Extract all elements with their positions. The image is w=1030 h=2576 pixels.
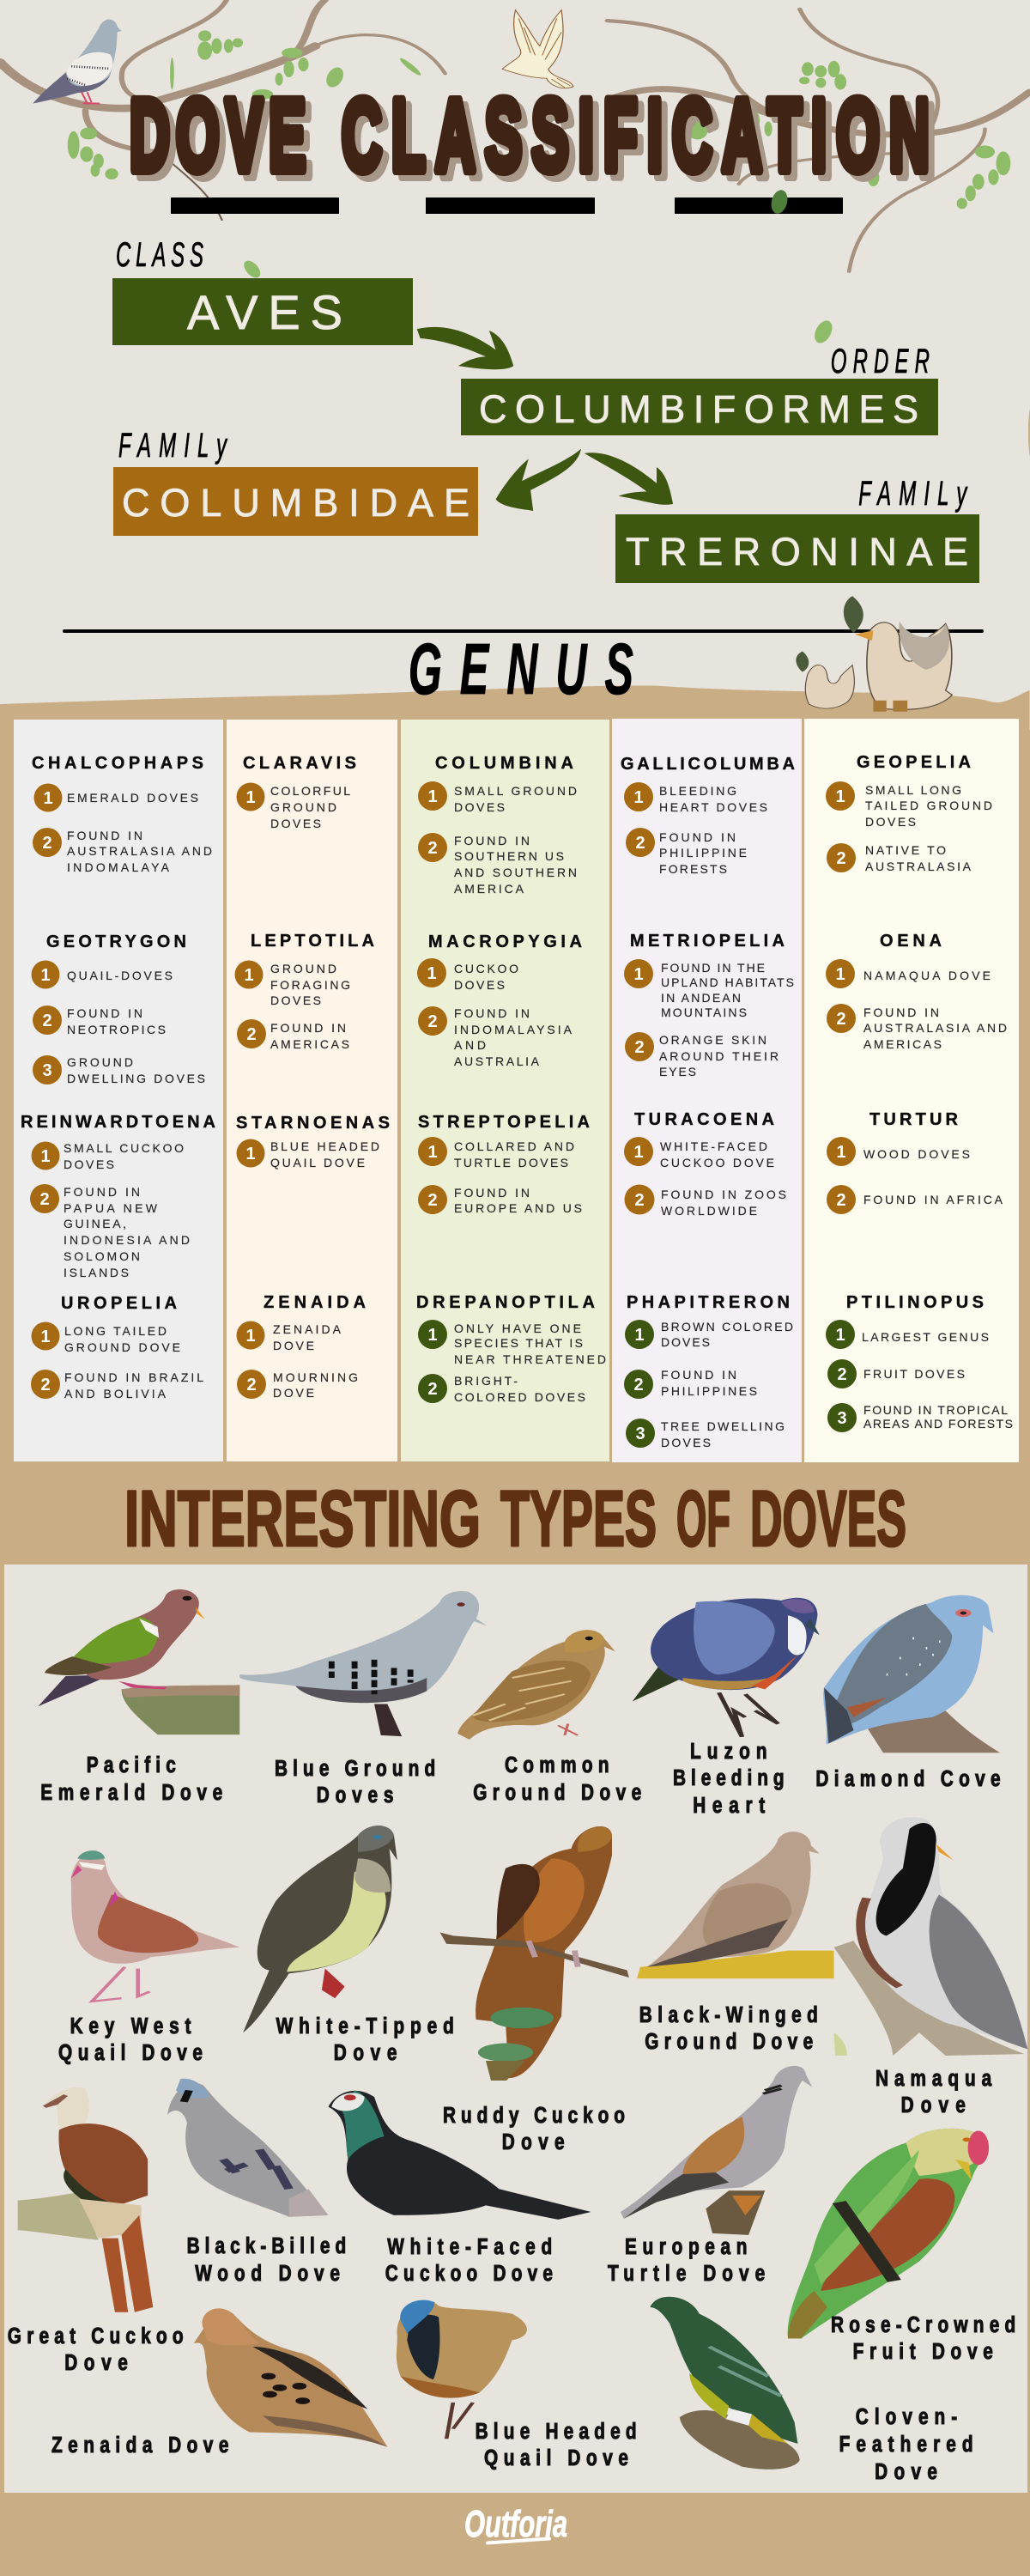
chalcophaps: CHALCOPHAPS	[32, 754, 203, 773]
chalcophaps	[32, 754, 212, 874]
label: white-faced cuckoo dove: White-Faced	[387, 2234, 552, 2259]
bird: pacific emerald dove	[38, 1589, 239, 1735]
label: key west quail dove: Quail Dove	[58, 2040, 203, 2065]
columbidae box: COLUMBIDAE	[122, 481, 470, 525]
phapitreron: 2	[633, 1376, 644, 1394]
streptopelia: TURTLE DOVES	[454, 1156, 568, 1170]
label: black-billed wood dove	[187, 2233, 346, 2286]
turtur: WOOD DOVES	[863, 1147, 970, 1161]
label: namaqua dove	[876, 2066, 992, 2117]
metriopelia: AROUND THEIR	[659, 1049, 779, 1063]
treroninae box: TRERONINAE	[626, 530, 968, 574]
label: blue ground doves: Blue Ground	[275, 1756, 435, 1781]
bird: black-billed wood dove	[167, 2079, 328, 2217]
geopelia: NATIVE TO	[865, 843, 946, 857]
section heading: interesting types of doves: OF	[676, 1475, 730, 1563]
reinwardtoena: ISLANDS	[64, 1266, 129, 1279]
section heading: interesting types of doves: TYPES	[500, 1475, 657, 1563]
label: european turtle dove: Turtle Dove	[608, 2261, 765, 2286]
title: DOVE	[130, 80, 312, 192]
ptilinopus: PTILINOPUS	[846, 1293, 984, 1312]
oena: 1	[835, 965, 845, 984]
metriopelia: IN ANDEAN	[661, 991, 741, 1005]
label: ruddy cuckoo dove: Dove	[502, 2129, 565, 2154]
oena: AMERICAS	[863, 1037, 942, 1051]
label: white-faced cuckoo dove	[385, 2234, 553, 2286]
label: cloven-feathered dove: Cloven-	[856, 2404, 957, 2429]
metriopelia: 1	[633, 965, 644, 984]
panel: dove gallery	[4, 1564, 1027, 2493]
bird: rose-crowned fruit dove	[788, 2129, 989, 2338]
bird: ruddy cuckoo dove	[440, 1826, 629, 2081]
label: luzon bleeding heart: Bleeding	[673, 1765, 785, 1790]
order label: ORDER	[831, 342, 930, 380]
metriopelia: 2	[634, 1038, 645, 1057]
drepanoptila: DREPANOPTILA	[416, 1293, 595, 1312]
turacoena	[624, 1110, 786, 1218]
reinwardtoena: GUINEA,	[64, 1217, 126, 1230]
turtur: TURTUR	[869, 1110, 959, 1129]
bird: blue ground dove	[239, 1591, 488, 1736]
uropelia: UROPELIA	[61, 1294, 177, 1313]
uropelia: 1	[40, 1327, 51, 1346]
reinwardtoena: 2	[39, 1190, 50, 1209]
bird: zenaida dove	[194, 2308, 387, 2447]
gallicolumba: GALLICOLUMBA	[621, 755, 795, 774]
reinwardtoena	[21, 1113, 215, 1279]
leptotila: FOUND IN	[270, 1021, 346, 1035]
label: luzon bleeding heart	[673, 1739, 785, 1818]
phapitreron: 1	[634, 1326, 645, 1345]
gallicolumba: 1	[633, 788, 644, 807]
turacoena: CUCKOO DOVE	[660, 1156, 774, 1170]
title	[130, 80, 945, 198]
geopelia: AUSTRALASIA	[865, 860, 972, 873]
starnoenas: 1	[245, 1145, 256, 1163]
drepanoptila: SPECIES THAT IS	[454, 1336, 583, 1350]
label: great cuckoo dove	[8, 2324, 184, 2375]
leptotila: LEPTOTILA	[251, 932, 374, 951]
family label left: FAMILy	[118, 426, 228, 464]
title: CLASSIFICATION	[348, 86, 945, 198]
bird: key west quail dove	[71, 1850, 239, 2002]
drepanoptila: 1	[427, 1326, 438, 1345]
label: rose-crowned fruit dove: Rose-Crowned	[831, 2312, 1015, 2337]
leptotila: AMERICAS	[270, 1037, 349, 1051]
metriopelia: METRIOPELIA	[630, 932, 785, 951]
claravis	[237, 754, 356, 830]
streptopelia: EUROPE AND US	[454, 1201, 582, 1215]
zenaida: DOVE	[273, 1339, 314, 1352]
aves box: AVES	[187, 285, 342, 339]
reinwardtoena: SOLOMON	[64, 1249, 140, 1263]
icon: pigeon on branch	[33, 19, 122, 104]
reinwardtoena: REINWARDTOENA	[21, 1113, 215, 1132]
panel: genus column 1	[14, 720, 223, 1461]
geopelia: TAILED GROUND	[865, 799, 992, 812]
geotrygon: DWELLING DOVES	[67, 1072, 205, 1085]
genus heading: GENUS	[409, 629, 633, 709]
label: ruddy cuckoo dove	[443, 2103, 625, 2154]
streptopelia: 1	[427, 1143, 438, 1162]
turacoena: WORLDWIDE	[661, 1204, 757, 1218]
geotrygon: 1	[40, 966, 51, 985]
drepanoptila: NEAR THREATENED	[454, 1352, 606, 1366]
label: cloven-feathered dove: Dove	[875, 2459, 937, 2484]
reinwardtoena: INDONESIA AND	[64, 1233, 190, 1247]
label: blue headed quail dove	[476, 2419, 637, 2470]
geotrygon	[31, 933, 205, 1085]
bird: common ground dove	[457, 1630, 615, 1740]
zenaida	[237, 1293, 366, 1400]
macropygia: CUCKOO	[454, 962, 518, 975]
aves box	[112, 278, 413, 345]
columbina: DOVES	[454, 800, 505, 814]
uropelia: 2	[40, 1376, 51, 1394]
gallicolumba: PHILIPPINE	[659, 846, 747, 860]
label: cloven-feathered dove: Feathered	[839, 2432, 973, 2457]
turtur: 2	[836, 1191, 846, 1210]
streptopelia: STREPTOPELIA	[418, 1113, 590, 1132]
arrow: aves to columbiformes	[417, 327, 513, 369]
label: namaqua dove: Dove	[901, 2093, 966, 2117]
leptotila: 2	[246, 1025, 257, 1044]
title: CLASSIFICATION	[342, 80, 939, 192]
claravis: DOVES	[270, 817, 321, 830]
geotrygon: NEOTROPICS	[67, 1023, 166, 1036]
starnoenas: STARNOENAS	[236, 1114, 390, 1133]
turacoena: FOUND IN ZOOS	[661, 1188, 786, 1201]
label: black-billed wood dove: Wood Dove	[195, 2261, 340, 2286]
macropygia: AND	[454, 1038, 486, 1052]
geopelia: 2	[836, 849, 846, 868]
label: blue headed quail dove: Quail Dove	[484, 2445, 628, 2470]
title: DOVE	[136, 86, 318, 198]
claravis: COLORFUL	[270, 784, 350, 798]
bird: white-faced cuckoo dove	[328, 2090, 591, 2220]
columbina: 2	[427, 839, 438, 858]
leptotila: 1	[244, 966, 254, 985]
macropygia	[417, 933, 582, 1068]
streptopelia: 2	[427, 1191, 438, 1210]
bird: great cuckoo dove	[18, 2087, 153, 2312]
phapitreron: FOUND IN	[661, 1368, 736, 1382]
label: blue ground doves	[275, 1756, 435, 1807]
oena: NAMAQUA DOVE	[863, 969, 991, 982]
columbina: AMERICA	[454, 882, 524, 896]
bird: european turtle dove	[621, 2066, 812, 2235]
starnoenas: QUAIL DOVE	[270, 1156, 365, 1170]
reinwardtoena: SMALL CUCKOO	[64, 1141, 184, 1155]
label: pacific emerald dove	[40, 1753, 222, 1805]
reinwardtoena: PAPUA NEW	[64, 1201, 158, 1215]
phapitreron: PHILIPPINES	[661, 1384, 757, 1398]
label: white-tipped dove: White-Tipped	[276, 2014, 454, 2038]
macropygia: 2	[427, 1012, 438, 1031]
label: black-winged ground dove: Black-Winged	[639, 2002, 818, 2027]
label: common ground dove: Common	[505, 1753, 609, 1777]
label: zenaida dove: Zenaida Dove	[52, 2433, 228, 2458]
small leaf accent	[834, 2032, 847, 2056]
gallicolumba: FOUND IN	[659, 830, 736, 844]
macropygia: FOUND IN	[454, 1006, 530, 1020]
geotrygon: FOUND IN	[67, 1006, 142, 1020]
ptilinopus: 1	[835, 1326, 845, 1345]
phapitreron: DOVES	[661, 1436, 711, 1449]
label: key west quail dove	[58, 2014, 203, 2065]
columbina: SMALL GROUND	[454, 784, 577, 798]
geopelia	[826, 753, 992, 873]
label: pacific emerald dove: Pacific	[87, 1753, 176, 1777]
streptopelia: FOUND IN	[454, 1186, 530, 1200]
macropygia: 1	[427, 964, 437, 983]
uropelia: GROUND DOVE	[64, 1340, 180, 1354]
gallicolumba: HEART DOVES	[659, 800, 767, 814]
geotrygon: 3	[42, 1061, 52, 1080]
columbina: 1	[427, 787, 438, 806]
label: common ground dove: Ground Dove	[473, 1780, 641, 1805]
uropelia: FOUND IN BRAZIL	[64, 1370, 203, 1384]
macropygia: AUSTRALIA	[454, 1054, 540, 1068]
leptotila: FORAGING	[270, 978, 350, 992]
section heading: interesting types of doves	[124, 1475, 906, 1563]
metriopelia	[624, 932, 794, 1078]
label: black-winged ground dove: Ground Dove	[645, 2029, 813, 2054]
panel: genus column 5	[804, 719, 1019, 1462]
phapitreron: PHAPITRERON	[627, 1293, 790, 1312]
turtur	[827, 1110, 1003, 1214]
starnoenas: BLUE HEADED	[270, 1139, 379, 1153]
zenaida: DOVE	[273, 1386, 314, 1400]
zenaida: 1	[245, 1327, 256, 1346]
starnoenas	[236, 1114, 390, 1170]
section heading: interesting types of doves: INTERESTING	[124, 1475, 481, 1563]
label: great cuckoo dove: Dove	[64, 2350, 128, 2375]
macropygia: DOVES	[454, 978, 505, 992]
gallicolumba: BLEEDING	[659, 784, 736, 798]
icon: flying dove	[502, 10, 573, 88]
phapitreron	[624, 1293, 793, 1449]
label: european turtle dove	[608, 2234, 765, 2286]
oena: 2	[836, 1010, 846, 1029]
chalcophaps: INDOMALAYA	[67, 860, 170, 874]
metriopelia: ORANGE SKIN	[659, 1033, 766, 1047]
columbina: AND SOUTHERN	[454, 866, 577, 879]
label: diamond dove: Diamond Cove	[815, 1766, 1001, 1791]
label: luzon bleeding heart: Luzon	[690, 1739, 767, 1764]
label: black-billed wood dove: Black-Billed	[187, 2233, 346, 2258]
metriopelia: MOUNTAINS	[661, 1005, 747, 1019]
arrow: to treroninae	[585, 453, 673, 505]
geopelia: 1	[835, 787, 845, 806]
gallicolumba: 2	[635, 834, 645, 853]
ptilinopus: 3	[837, 1409, 847, 1428]
claravis: 1	[245, 788, 256, 807]
oena: OENA	[880, 932, 942, 951]
ptilinopus: 2	[837, 1365, 847, 1384]
treroninae box	[615, 514, 979, 583]
label: rose-crowned fruit dove: Fruit Dove	[853, 2339, 993, 2364]
bird: blue headed quail dove	[397, 2300, 527, 2439]
metriopelia: EYES	[659, 1065, 696, 1078]
turacoena: 2	[634, 1191, 645, 1210]
columbina: FOUND IN	[454, 834, 530, 848]
phapitreron: 3	[635, 1425, 645, 1443]
label: european turtle dove: European	[625, 2234, 747, 2259]
turtur: 1	[836, 1143, 846, 1162]
columbina: COLUMBINA	[435, 754, 573, 773]
columbina: SOUTHERN US	[454, 849, 564, 863]
columbidae box	[113, 467, 478, 536]
label: ruddy cuckoo dove: Ruddy Cuckoo	[443, 2103, 625, 2128]
uropelia: AND BOLIVIA	[64, 1387, 167, 1400]
columbina	[418, 754, 577, 896]
label: black-winged ground dove	[639, 2002, 818, 2054]
ptilinopus: LARGEST GENUS	[862, 1330, 989, 1344]
phapitreron: DOVES	[661, 1335, 710, 1349]
drepanoptila	[416, 1293, 606, 1404]
columbiformes box: COLUMBIFORMES	[479, 387, 918, 431]
phapitreron: TREE DWELLING	[661, 1419, 785, 1433]
footer logo: outforia: Outforia	[464, 2503, 567, 2545]
geopelia: SMALL LONG	[865, 783, 961, 797]
zenaida: ZENAIDA	[264, 1293, 366, 1312]
reinwardtoena: DOVES	[64, 1157, 114, 1171]
geotrygon: 2	[42, 1012, 52, 1030]
leptotila: GROUND	[270, 962, 336, 975]
bird: diamond dove	[823, 1595, 1000, 1753]
gallicolumba	[621, 755, 795, 876]
streptopelia	[418, 1113, 590, 1215]
oena: FOUND IN	[863, 1005, 939, 1019]
turtur: FOUND IN AFRICA	[863, 1193, 1003, 1206]
label: blue ground doves: Doves	[317, 1783, 393, 1807]
uropelia	[31, 1294, 203, 1400]
label: namaqua dove: Namaqua	[876, 2066, 992, 2091]
geotrygon: QUAIL-DOVES	[67, 969, 173, 982]
macropygia: INDOMALAYSIA	[454, 1023, 573, 1036]
chalcophaps: AUSTRALASIA AND	[67, 844, 212, 858]
geotrygon: GROUND	[67, 1055, 133, 1069]
geopelia: GEOPELIA	[857, 753, 971, 772]
leptotila: DOVES	[270, 993, 321, 1007]
icon: cartoon doves	[796, 596, 952, 712]
label: white-tipped dove	[276, 2014, 454, 2065]
label: white-faced cuckoo dove: Cuckoo Dove	[385, 2261, 553, 2286]
bird: black-winged ground dove	[637, 1832, 834, 1978]
decorative vines and leaves	[0, 0, 1030, 271]
label: blue headed quail dove: Blue Headed	[476, 2419, 637, 2444]
uropelia: LONG TAILED	[64, 1324, 167, 1338]
label: luzon bleeding heart: Heart	[693, 1793, 765, 1818]
leptotila	[235, 932, 374, 1051]
turacoena: WHITE-FACED	[660, 1139, 767, 1153]
turacoena: TURACOENA	[634, 1110, 774, 1129]
chalcophaps: FOUND IN	[67, 829, 142, 842]
ptilinopus: FOUND IN TROPICAL	[863, 1403, 1008, 1417]
chalcophaps: 2	[42, 834, 52, 853]
label: common ground dove	[473, 1753, 641, 1805]
divider line	[63, 629, 984, 633]
chalcophaps: 1	[43, 789, 53, 808]
label: key west quail dove: Key West	[70, 2014, 191, 2038]
panel: genus column 4	[612, 719, 802, 1462]
panel: genus column 2	[227, 720, 397, 1461]
metriopelia: UPLAND HABITATS	[661, 975, 794, 989]
label: cloven-feathered dove	[839, 2404, 973, 2484]
section heading: interesting types of doves: DOVES	[750, 1475, 906, 1563]
label: pacific emerald dove: Emerald Dove	[40, 1780, 222, 1805]
claravis: GROUND	[270, 800, 336, 814]
gallicolumba: FORESTS	[659, 862, 727, 876]
arrow: to columbidae	[496, 449, 581, 511]
reinwardtoena: FOUND IN	[64, 1185, 140, 1199]
zenaida: 2	[246, 1376, 257, 1394]
black title bars	[171, 188, 843, 216]
drepanoptila: ONLY HAVE ONE	[454, 1321, 581, 1335]
class label: CLASS	[116, 235, 203, 273]
tan background band	[0, 405, 1030, 737]
bird: namaqua dove	[834, 1817, 1027, 2056]
drepanoptila: 2	[427, 1380, 438, 1399]
zenaida: ZENAIDA	[273, 1322, 342, 1336]
bird: cloven-feathered dove	[650, 2297, 800, 2470]
ptilinopus: FRUIT DOVES	[863, 1367, 965, 1381]
label: rose-crowned fruit dove	[831, 2312, 1015, 2364]
turacoena: 1	[633, 1143, 644, 1162]
geopelia: DOVES	[865, 815, 916, 829]
oena	[826, 932, 1007, 1051]
ptilinopus	[826, 1293, 1013, 1432]
family label right: FAMILy	[858, 474, 968, 512]
streptopelia: COLLARED AND	[454, 1139, 574, 1153]
bird: white-tipped dove	[243, 1826, 397, 2032]
claravis: CLARAVIS	[243, 754, 356, 773]
drepanoptila: BRIGHT-	[454, 1374, 518, 1388]
drepanoptila: COLORED DOVES	[454, 1390, 585, 1404]
oena: AUSTRALASIA AND	[863, 1021, 1007, 1035]
zenaida: MOURNING	[273, 1370, 358, 1384]
label: great cuckoo dove: Great Cuckoo	[8, 2324, 184, 2348]
phapitreron: BROWN COLORED	[661, 1320, 793, 1334]
macropygia: MACROPYGIA	[428, 933, 582, 951]
reinwardtoena: 1	[40, 1147, 51, 1166]
geotrygon: GEOTRYGON	[46, 933, 186, 951]
metriopelia: FOUND IN THE	[661, 961, 765, 975]
bird: luzon bleeding heart	[633, 1598, 820, 1737]
panel: genus column 3	[401, 720, 609, 1461]
ptilinopus: AREAS AND FORESTS	[863, 1417, 1013, 1431]
chalcophaps: EMERALD DOVES	[67, 791, 198, 805]
label: white-tipped dove: Dove	[334, 2040, 397, 2065]
